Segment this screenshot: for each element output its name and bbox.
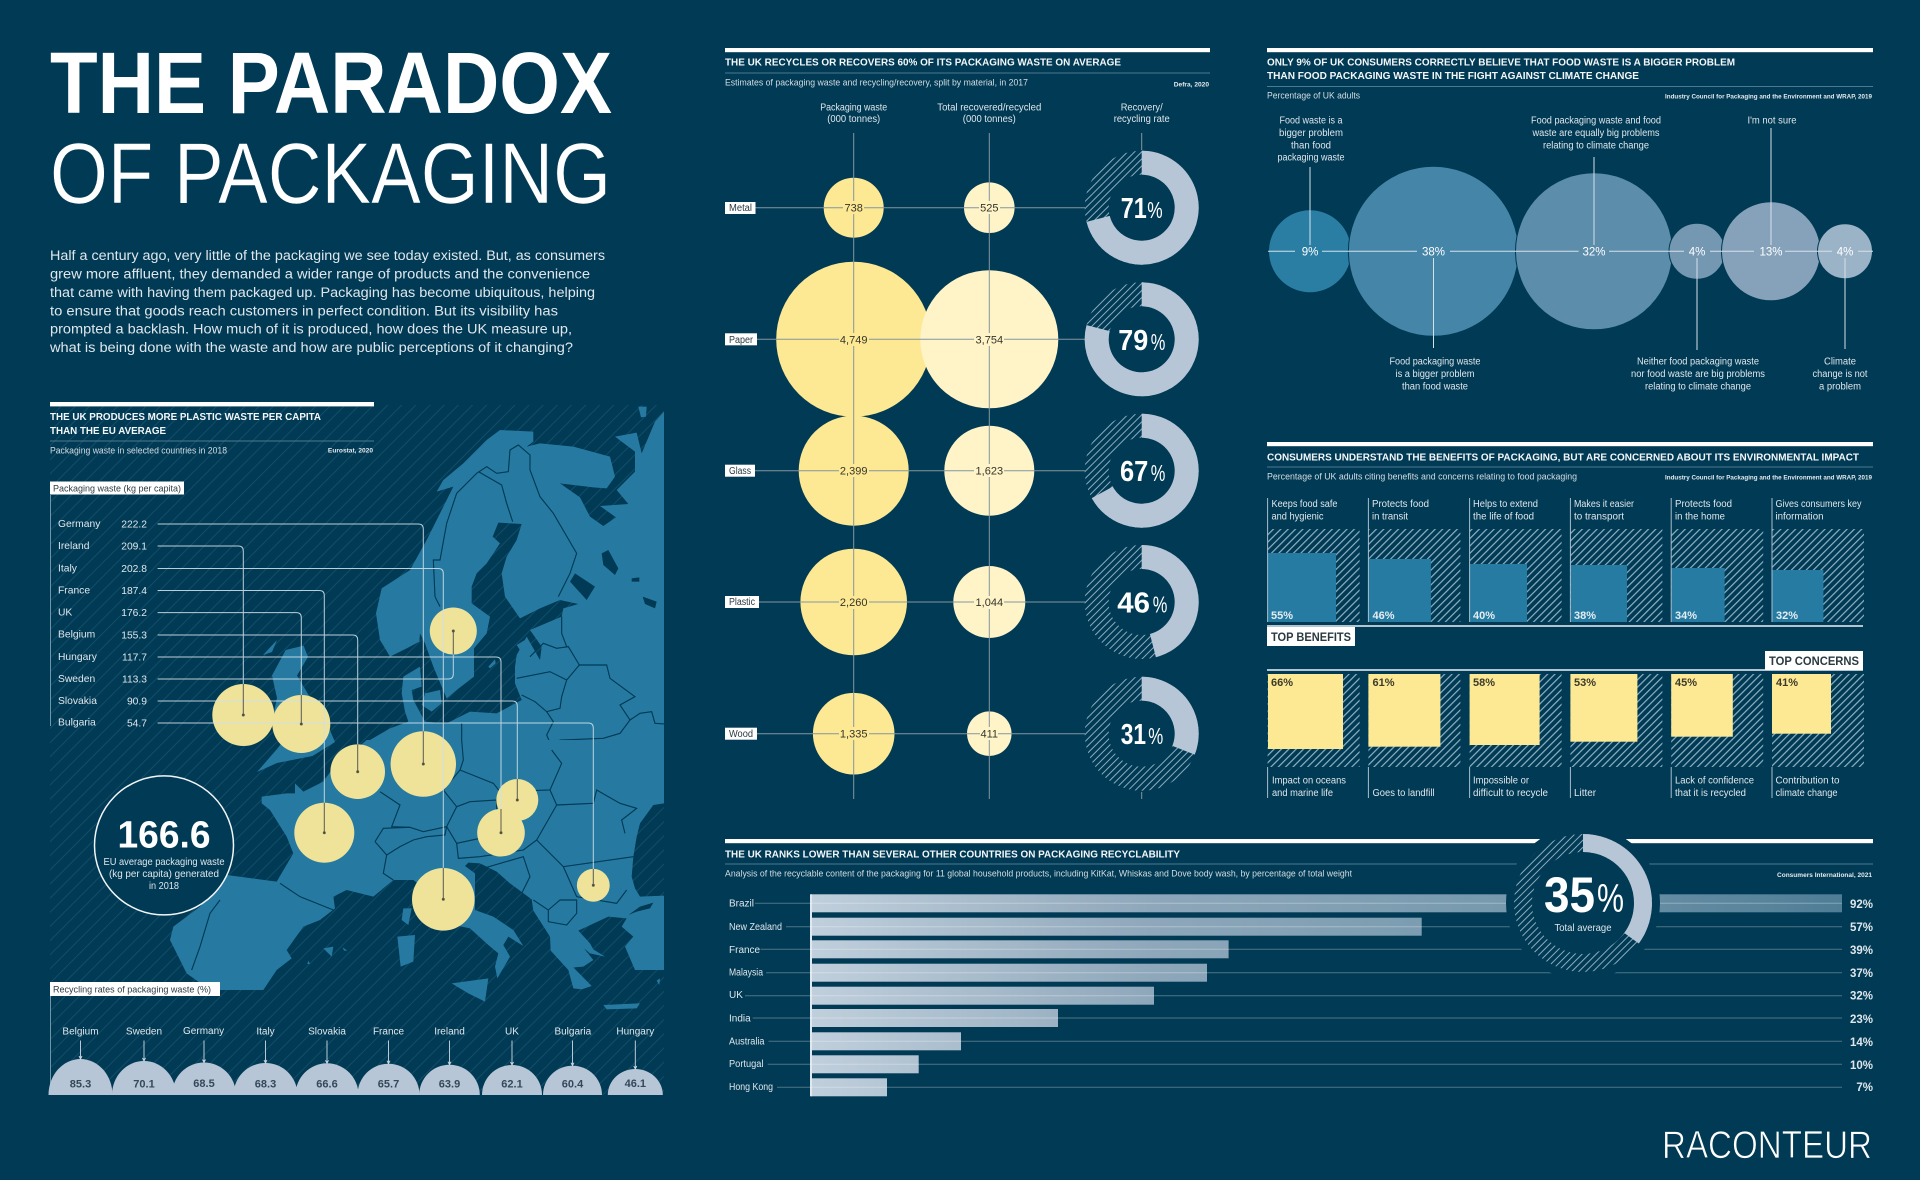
country waste list: Slovakia [58,696,97,707]
column headers: (000 tonnes) [963,114,1016,125]
bubble labels: is a bigger problem [1396,369,1474,380]
recycling rate domes: 46.1 [625,1078,646,1090]
chart: top concerns: Litter [1574,788,1597,799]
callout: EU average [94,776,234,915]
label: top benefits [1267,626,1863,646]
label: top concerns: TOP CONCERNS [1769,654,1859,668]
donut: plastic 46%: % [1153,592,1167,618]
number pills: 1,623 [976,466,1003,478]
row labels: Metal [729,203,752,214]
number pills: 525 [980,203,998,215]
section heading: climate: Industry Council for Packaging and the Environment and WRAP, 2019 [1665,94,1872,100]
donut: plastic 46% [1097,545,1199,657]
donut: wood 31%: 31 [1121,719,1146,751]
recycling rate domes: Belgium [62,1026,99,1038]
bubble labels: relating to climate change [1543,140,1649,152]
bubble values: 13% [1759,246,1783,258]
leader lines [158,524,593,899]
donut: metal 71%: % [1147,197,1163,223]
label: top concerns [1267,651,1863,670]
chart: top concerns: 58% [1473,677,1495,689]
bubble labels: than food [1291,140,1331,152]
bubble values: 4% [1837,246,1853,258]
recycling rate domes: 68.3 [255,1078,276,1090]
section heading: benefits: CONSUMERS UNDERSTAND THE BENEFITS OF PACKAGING, BUT ARE CONCERNED ABOUT ITS ENVIRONMENTAL IMPACT [1267,453,1860,464]
recycling rate domes: 65.7 [378,1078,399,1090]
recycling rate domes: 68.5 [193,1078,215,1090]
recycling rate domes: 85.3 [70,1078,91,1090]
country waste list [58,519,147,730]
chart: top benefits: 46% [1372,610,1395,622]
bubble values: 38% [1422,246,1445,258]
country waste list: 222.2 [121,520,147,530]
intro paragraph: grew more affluent, they demanded a wider range of products and the convenience [50,266,590,282]
country waste list: 176.2 [121,608,147,619]
bar chart: Australia [729,1036,765,1048]
chart: top benefits: Makes it easier [1574,499,1635,510]
country waste list: 202.8 [121,564,147,575]
number pills: 4,749 [840,334,867,346]
chart: top benefits: 38% [1574,610,1596,622]
bubble values: 32% [1582,246,1606,258]
recycling rate domes [48,1026,663,1095]
section heading: plastic waste [50,402,374,456]
chart: top benefits: 34% [1675,610,1697,622]
recycling rate domes: Sweden [126,1026,162,1038]
title: THE PARADOX [50,35,612,132]
chart: top benefits: Protects food [1372,499,1429,510]
intro paragraph: what is being done with the waste and how are public perceptions of it changing? [49,340,573,355]
country waste list: 90.9 [127,696,147,708]
bar chart: 7% [1856,1082,1873,1094]
recycling rate domes: Slovakia [308,1026,346,1038]
intro paragraph: that came with having them packaged up. Packaging has become ubiquitous, helping [50,285,595,300]
recycling rate domes: 70.1 [133,1078,155,1090]
section heading: climate: THAN FOOD PACKAGING WASTE IN THE FIGHT AGAINST CLIMATE CHANGE [1267,71,1639,82]
column headers: Total recovered/recycled [937,102,1041,114]
section heading: recyclability: THE UK RANKS LOWER THAN SEVERAL OTHER COUNTRIES ON PACKAGING RECYCLABILITY [725,849,1180,860]
callout: EU average: (kg per capita) generated [109,869,219,880]
chart: top benefits: 40% [1473,610,1495,622]
bubble labels: Food packaging waste and food [1531,116,1661,126]
panel: recovery by material [725,48,1210,799]
section heading: climate: ONLY 9% OF UK CONSUMERS CORRECTLY BELIEVE THAT FOOD WASTE IS A BIGGER PROBLEM [1267,58,1735,69]
bar chart: 23% [1850,1014,1873,1026]
yellow bubbles on map [212,608,610,931]
intro paragraph: to ensure that goods reach customers in perfect condition. But its visibility has [50,304,558,318]
bar chart: 32% [1850,990,1873,1002]
label: top benefits: TOP BENEFITS [1271,630,1351,644]
country waste list: UK [58,608,72,618]
donut: wood 31%: % [1148,723,1163,749]
bar chart: Malaysia [729,968,763,978]
country waste list: 54.7 [127,718,147,730]
bubble labels: bigger problem [1279,128,1343,139]
chart: top benefits: to transport [1574,512,1624,523]
bar chart: 57% [1850,922,1873,934]
row labels: Wood [729,729,753,740]
bar chart [729,894,1873,1096]
section heading: climate [1267,48,1873,102]
number pills: 1,335 [840,729,867,741]
donut: total average 35%: 35 [1544,867,1595,923]
bubble labels: packaging waste [1278,152,1345,164]
bar chart: 37% [1850,968,1873,980]
recycling rate domes: 62.1 [501,1078,523,1090]
country waste list: 117.7 [122,652,147,664]
bar chart: 10% [1850,1060,1873,1072]
donut: glass 67%: 67 [1120,456,1148,488]
recycling rate domes: 63.9 [439,1078,460,1090]
intro paragraph: prompted a backlash. How much of it is produced, how does the UK measure up, [50,322,572,336]
section heading: climate: Percentage of UK adults [1267,90,1360,102]
bar chart: 39% [1850,945,1873,957]
bubble labels: change is not [1812,369,1868,380]
chart: top concerns: Impossible or [1473,776,1530,786]
bubble guide lines [1268,128,1873,350]
column headers: (000 tonnes) [827,114,880,125]
section heading: recycling: THE UK RECYCLES OR RECOVERS 60% OF ITS PACKAGING WASTE ON AVERAGE [725,58,1121,69]
country waste list: Belgium [58,630,95,640]
number pills: 1,044 [976,597,1003,609]
country waste list: 187.4 [121,586,147,597]
recycling rate domes: UK [505,1026,519,1038]
section heading: plastic waste: Eurostat, 2020 [328,448,373,454]
legend: recycling rates: Recycling rates of packaging waste (%) [53,984,211,996]
panel: benefits and concerns [1267,442,1873,799]
bubble values: 9% [1302,246,1318,258]
donut: plastic 46%: 46 [1117,588,1150,620]
chart: top benefits: the life of food [1473,512,1534,523]
recycling rate domes: 66.6 [316,1078,338,1090]
number pills: 411 [981,729,998,741]
bubble values: 4% [1689,246,1705,258]
bubble labels: than food waste [1402,382,1468,392]
section heading: benefits: Industry Council for Packaging and the Environment and WRAP, 2019 [1665,474,1872,482]
country waste list: Bulgaria [58,718,96,728]
section heading: recycling: Estimates of packaging waste and recycling/recovery, split by material, in 2017 [725,78,1028,88]
chart: top concerns: Goes to landfill [1372,788,1434,799]
grid lines [750,133,1142,799]
donut: total average 35% [1506,826,1660,980]
recycling rate domes: Italy [256,1026,275,1038]
bar chart: France [729,945,761,956]
bubble labels: Food packaging waste [1390,356,1481,368]
bubble labels: a problem [1819,382,1861,392]
donut: metal 71% [1086,151,1199,265]
panel: climate perceptions [1267,48,1873,392]
donut: paper 79%: % [1151,329,1165,355]
section heading: plastic waste: THE UK PRODUCES MORE PLASTIC WASTE PER CAPITA [50,412,322,423]
section heading: recycling: Defra, 2020 [1174,82,1209,88]
chart: top benefits: and hygienic [1272,512,1324,523]
chart: top benefits: in the home [1675,512,1725,523]
recycling rate domes: France [373,1026,404,1038]
row labels: Plastic [729,597,755,608]
country waste list: Italy [58,564,78,574]
section heading: recyclability: Consumers International, 2021 [1777,872,1872,879]
number pills: 2,399 [840,466,867,478]
number pills: 2,260 [840,597,867,609]
chart: top concerns: and marine life [1272,788,1333,799]
bubble labels: nor food waste are big problems [1631,369,1765,380]
section heading: benefits: Percentage of UK adults citing benefits and concerns relating to food packaging [1267,472,1577,482]
callout: EU average: EU average packaging waste [104,857,225,868]
chart: top concerns: 66% [1271,677,1293,689]
intro paragraph: Half a century ago, very little of the packaging we see today existed. But, as consumers [50,248,605,263]
chart: top concerns [1268,674,1864,799]
panel: plastic waste map [48,402,664,1095]
bubble labels [1278,116,1868,392]
column headers: Recovery/ [1121,102,1163,114]
logo: Raconteur: RACONTEUR [1662,1124,1872,1167]
recycling rate domes: Ireland [434,1026,465,1038]
chart: top benefits: Gives consumers key [1776,499,1862,510]
number pills: 3,754 [976,334,1003,346]
section heading: recyclability [725,839,1873,880]
donut: wood 31% [1097,677,1199,779]
chart: top concerns: that it is recycled [1675,788,1746,799]
chart: top concerns: Lack of confidence [1675,776,1754,786]
chart: top benefits: in transit [1372,512,1408,523]
bubble labels: Food waste is a [1280,116,1343,126]
bar chart: Portugal [729,1059,764,1070]
chart: top concerns: 41% [1776,677,1798,689]
bar chart: 14% [1850,1037,1873,1049]
bar chart: New Zealand [729,922,782,933]
chart: top concerns: 53% [1574,677,1596,689]
country waste list: 155.3 [121,630,147,642]
section heading: recyclability: Analysis of the recyclable content of the packaging for 11 global household products, including KitKat, Whiskas and Dove body wash, by percentage of total weight [725,868,1352,880]
bubble labels: Neither food packaging waste [1637,356,1759,368]
country waste list: Sweden [58,674,95,685]
donut: total average 35%: % [1597,877,1624,921]
column headers: Packaging waste [820,102,888,114]
bar chart: 92% [1850,899,1873,911]
row labels: Paper [729,335,754,346]
intro paragraph [49,248,605,355]
chart: top benefits: 55% [1271,610,1293,622]
legend: recycling rates [50,982,220,1095]
bubble labels: I'm not sure [1748,116,1797,126]
chart: top benefits: 32% [1776,610,1798,622]
bubble labels: waste are equally big problems [1532,128,1660,139]
donut: glass 67%: % [1151,460,1165,486]
recycling rate domes: Germany [183,1026,224,1037]
chart: top concerns: 45% [1675,677,1697,689]
section heading: plastic waste: THAN THE EU AVERAGE [50,426,166,437]
bubbles: packaging waste [776,178,931,774]
donut: metal 71%: 71 [1121,193,1147,225]
legend: packaging waste per capita: Packaging waste (kg per capita) [53,484,181,494]
bar chart: India [729,1014,751,1024]
chart: top concerns: climate change [1776,788,1838,799]
opinion bubbles [1268,166,1872,336]
bar chart: Brazil [729,898,754,910]
row labels: Glass [729,466,751,477]
donut: glass 67% [1092,414,1199,528]
chart: top concerns: 61% [1372,677,1395,689]
country waste list: 113.3 [122,674,147,686]
bar chart: UK [729,990,743,1001]
bar chart: Hong Kong [729,1082,773,1093]
chart: top concerns: Impact on oceans [1272,776,1346,786]
chart: top benefits: Protects food [1675,499,1732,510]
row labels [725,202,759,740]
column headers [820,102,1170,125]
title [50,35,612,222]
chart: top concerns: difficult to recycle [1473,788,1548,799]
map of Europe [50,405,664,1095]
chart: top benefits [1268,498,1864,622]
chart: top benefits: Keeps food safe [1272,499,1338,510]
number pills: 738 [845,203,863,215]
callout: EU average: in 2018 [149,881,179,892]
chart: top benefits: Helps to extend [1473,499,1538,510]
country waste list: Germany [58,519,101,530]
country waste list: France [58,586,90,596]
legend: packaging waste per capita [50,482,184,726]
recycling rate domes: Bulgaria [554,1026,592,1038]
number pills [839,201,1004,741]
donut: paper 79% [1085,282,1199,396]
recycling rate domes: Hungary [616,1026,654,1038]
column headers: recycling rate [1114,114,1170,125]
chart: top benefits: information [1776,512,1824,523]
section heading: plastic waste: Packaging waste in selected countries in 2018 [50,446,227,456]
bubble pointers [242,630,594,900]
donut: total average 35%: Total average [1554,922,1612,934]
callout: EU average: 166.6 [118,815,210,857]
country waste list: 209.1 [121,542,147,552]
bubble values [1302,246,1853,258]
country waste list: Hungary [58,652,98,663]
chart: top concerns: Contribution to [1776,776,1840,786]
section heading: recycling [725,48,1210,88]
bubble labels: Climate [1824,356,1856,368]
bubble labels: relating to climate change [1645,382,1751,392]
section heading: benefits [1267,442,1873,482]
bubbles: recovered [920,182,1058,756]
panel: recyclability ranking [725,826,1873,1096]
recycling rate domes: 60.4 [562,1078,584,1090]
title: OF PACKAGING [50,126,611,222]
country waste list: Ireland [58,541,90,552]
donut: paper 79%: 79 [1118,325,1148,357]
